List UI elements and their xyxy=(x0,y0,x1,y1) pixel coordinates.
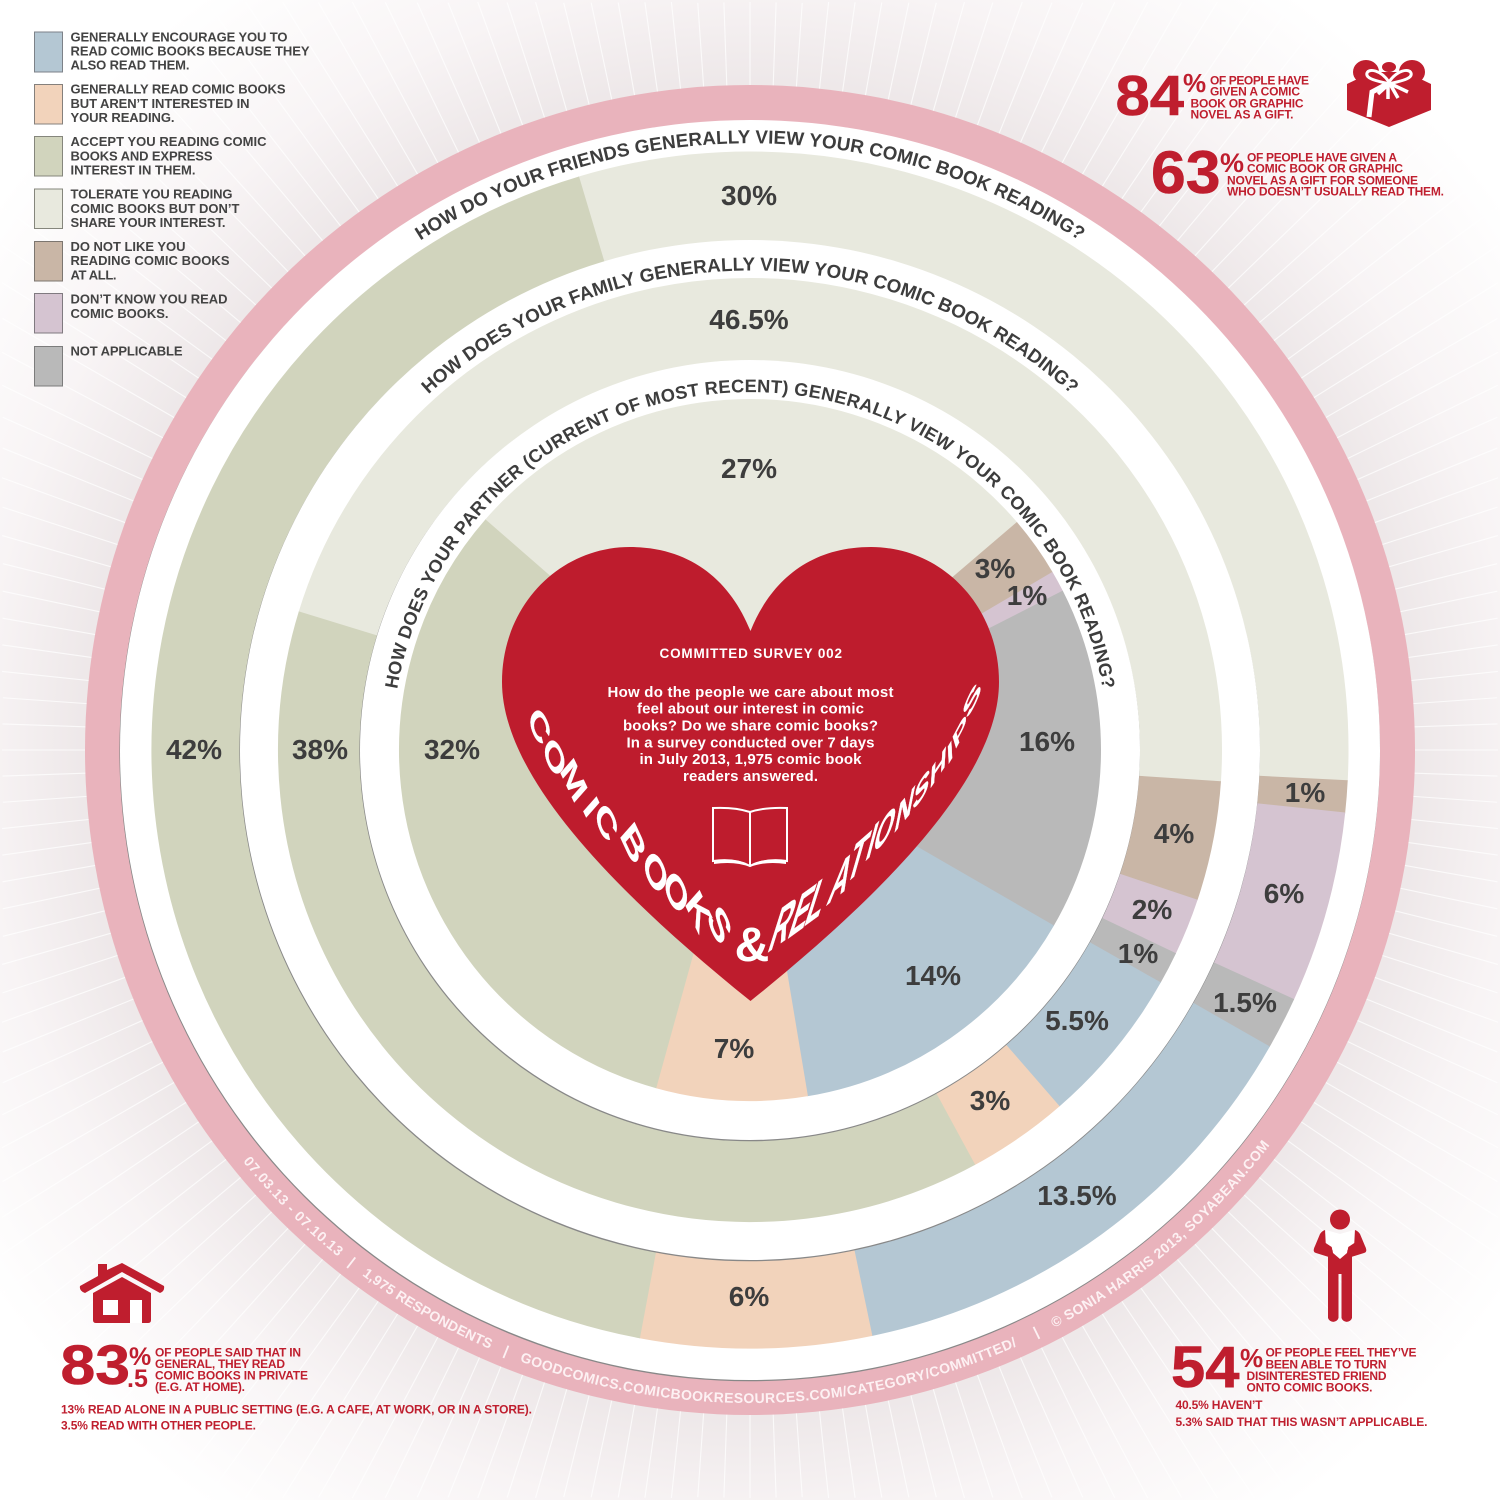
title: comic books: M xyxy=(555,751,592,810)
icon: person reading xyxy=(1314,1210,1366,1322)
stat: 84 percent gift xyxy=(1116,64,1309,128)
legend item: tolerate: TOLERATE YOU READING xyxy=(70,186,232,202)
stat: 54 percent converted friend: OF PEOPLE FEEL THEY’VE xyxy=(1266,1346,1416,1360)
percentage labels: 2% xyxy=(1132,894,1172,925)
pie chart: partner xyxy=(502,502,998,998)
ring chart: family xyxy=(143,143,1357,1357)
stat: 54 percent converted friend: % xyxy=(1240,1343,1263,1373)
stat: 54 percent converted friend: 5.3% SAID THAT THIS WASN’T APPLICABLE. xyxy=(1176,1415,1428,1429)
percentage labels: 1% xyxy=(1007,580,1047,611)
legend item: do not know xyxy=(34,292,228,333)
stat: 83.5 percent private: % xyxy=(129,1343,151,1371)
title: relationships: H xyxy=(918,730,959,805)
stat: 63 percent gift xyxy=(1151,139,1444,206)
icon: house xyxy=(80,1263,164,1323)
stat: 63 percent gift: % xyxy=(1220,148,1244,178)
legend item: tolerate xyxy=(34,186,240,230)
footer text on pink ring xyxy=(244,1140,1270,1404)
stat: 84 percent gift: BOOK OR GRAPHIC xyxy=(1190,96,1304,110)
footer text on pink ring: | xyxy=(346,1257,356,1268)
stat: 84 percent gift: % xyxy=(1183,68,1206,98)
legend item: read but not interested: GENERALLY READ COMIC BOOKS xyxy=(70,82,286,96)
title: comic books: B xyxy=(615,814,653,872)
legend item: tolerate: SHARE YOUR INTEREST. xyxy=(70,215,226,230)
title: relationships: A xyxy=(820,835,863,921)
title: ampersand: & xyxy=(735,919,769,972)
question: friends: HOW DO YOUR FRIENDS GENERALLY VIEW YOUR COMIC BOOK READING? xyxy=(414,130,1084,240)
legend item: accept xyxy=(34,134,267,178)
heart intro text: books? Do we share comic books? xyxy=(623,718,878,734)
stat: 83.5 percent private: 83 xyxy=(60,1333,130,1396)
footer text on pink ring: 07.03.13 - 07.10.13 xyxy=(244,1157,343,1256)
percentage labels: 27% xyxy=(721,453,777,484)
legend item: encourage: READ COMIC BOOKS BECAUSE THEY xyxy=(70,44,310,58)
percentage labels xyxy=(166,180,1325,1312)
percentage labels: 3% xyxy=(975,553,1015,584)
title: relationships: P xyxy=(941,699,979,766)
stat: 63 percent gift: COMIC BOOK OR GRAPHIC xyxy=(1247,162,1403,176)
legend item: accept: BOOKS AND EXPRESS xyxy=(70,148,213,164)
percentage labels: 6% xyxy=(729,1281,769,1312)
stat: 84 percent gift: NOVEL AS A GIFT. xyxy=(1190,108,1294,122)
title: relationships: I xyxy=(857,805,888,877)
legend item: encourage: ALSO READ THEM. xyxy=(70,58,190,72)
heart xyxy=(502,547,999,1016)
percentage labels: 14% xyxy=(905,960,961,991)
footer text on pink ring: | xyxy=(502,1346,510,1358)
title: relationships: N xyxy=(884,769,926,849)
title: relationships: E xyxy=(782,870,822,954)
stat: 63 percent gift: NOVEL AS A GIFT FOR SOMEONE xyxy=(1227,174,1418,188)
title: comic books: S xyxy=(701,897,738,953)
heart intro text: COMMITTED SURVEY 002 xyxy=(660,646,842,661)
title: comic books: K xyxy=(680,882,718,941)
percentage labels: 1% xyxy=(1118,938,1158,969)
outer pink ring xyxy=(85,85,1415,1415)
stat: 83.5 percent private: OF PEOPLE SAID THAT IN xyxy=(155,1346,301,1360)
stat: 63 percent gift: OF PEOPLE HAVE GIVEN A xyxy=(1247,150,1397,164)
legend item: do not like: AT ALL. xyxy=(70,268,116,282)
heart intro text xyxy=(608,646,894,785)
legend item: do not know: COMIC BOOKS. xyxy=(70,306,168,321)
title: comic books: O xyxy=(537,729,573,785)
footer text on pink ring: © SONIA HARRIS 2013, SOYABEAN.COM xyxy=(1052,1140,1270,1326)
title: relationships: O xyxy=(863,788,907,871)
stat: 83.5 percent private: COMIC BOOKS IN PRIVATE xyxy=(155,1368,308,1382)
legend item: tolerate: COMIC BOOKS BUT DON’T xyxy=(70,201,240,216)
heart intro text: How do the people we care about most xyxy=(608,684,894,701)
percentage labels: 1.5% xyxy=(1213,987,1277,1018)
percentage labels: 16% xyxy=(1019,726,1075,757)
title: relationships: R xyxy=(762,883,804,968)
icon: open book xyxy=(713,808,787,867)
question: family: HOW DOES YOUR FAMILY GENERALLY VIEW YOUR COMIC BOOK READING? xyxy=(420,258,1078,394)
stat: 83.5 percent private xyxy=(60,1333,532,1432)
stat: 83.5 percent private: .5 xyxy=(127,1365,148,1393)
stat: 54 percent converted friend: 54 xyxy=(1171,1335,1240,1400)
percentage labels: 46.5% xyxy=(709,304,789,335)
footer text on pink ring: | xyxy=(1032,1326,1040,1340)
percentage labels: 38% xyxy=(292,734,348,765)
stat: 84 percent gift: 84 xyxy=(1116,64,1184,128)
stat: 54 percent converted friend: BEEN ABLE TO TURN xyxy=(1266,1358,1386,1372)
stat: 84 percent gift: OF PEOPLE HAVE xyxy=(1210,74,1309,88)
legend item: not applicable xyxy=(34,344,183,386)
legend item: accept: ACCEPT YOU READING COMIC xyxy=(70,134,267,149)
legend item: do not know: DON’T KNOW YOU READ xyxy=(70,292,228,306)
legend item: do not like: DO NOT LIKE YOU xyxy=(70,239,186,254)
title: comic books: O xyxy=(636,842,675,903)
legend xyxy=(34,30,310,386)
title: relationships: I xyxy=(934,723,966,781)
stat: 83.5 percent private: (E.G. AT HOME). xyxy=(155,1380,245,1394)
title: comic books: C xyxy=(588,795,624,850)
percentage labels: 1% xyxy=(1285,777,1325,808)
stat: 54 percent converted friend: ONTO COMIC BOOKS. xyxy=(1246,1380,1372,1394)
percentage labels: 7% xyxy=(714,1033,754,1064)
footer text on pink ring: GOODCOMICS.COMICBOOKRESOURCES.COM/CATEGORY/COMMITTED/ xyxy=(521,1336,1016,1404)
stat: 63 percent gift: WHO DOESN’T USUALLY READ THEM. xyxy=(1227,184,1444,198)
title: relationships: T xyxy=(837,815,879,900)
heart intro text: in July 2013, 1,975 comic book xyxy=(640,751,862,768)
legend item: encourage xyxy=(34,30,310,72)
legend item: read but not interested: YOUR READING. xyxy=(70,110,174,125)
legend item: encourage: GENERALLY ENCOURAGE YOU TO xyxy=(70,30,288,44)
percentage labels: 5.5% xyxy=(1045,1005,1109,1036)
stat: 83.5 percent private: 13% READ ALONE IN A PUBLIC SETTING (E.G. A CAFE, AT WORK, OR IN A STORE). xyxy=(61,1402,532,1416)
legend item: accept: INTEREST IN THEM. xyxy=(70,162,196,178)
legend item: read but not interested xyxy=(34,82,286,125)
title: relationships: S xyxy=(901,752,942,828)
legend item: do not like: READING COMIC BOOKS xyxy=(70,253,230,268)
stat: 84 percent gift: GIVEN A COMIC xyxy=(1210,84,1300,98)
stat: 63 percent gift: 63 xyxy=(1151,139,1220,206)
heart intro text: readers answered. xyxy=(683,768,818,785)
title: comic books: C xyxy=(522,700,557,753)
stat: 54 percent converted friend xyxy=(1171,1335,1428,1429)
stat: 83.5 percent private: GENERAL, THEY READ xyxy=(155,1357,285,1371)
title: relationships: S xyxy=(951,665,993,736)
question: partner: HOW DOES YOUR PARTNER (CURRENT OF MOST RECENT) GENERALLY VIEW YOUR COMIC BOOK READING? xyxy=(385,380,1114,688)
stat: 83.5 percent private: 3.5% READ WITH OTHER PEOPLE. xyxy=(61,1418,256,1432)
title: comic books: O xyxy=(657,862,696,923)
percentage labels: 4% xyxy=(1154,818,1194,849)
percentage labels: 13.5% xyxy=(1037,1180,1117,1211)
title: comic books: I xyxy=(578,790,604,825)
legend item: not applicable: NOT APPLICABLE xyxy=(70,344,183,358)
percentage labels: 6% xyxy=(1264,878,1304,909)
percentage labels: 30% xyxy=(721,180,777,211)
footer text on pink ring: 1,975 RESPONDENTS xyxy=(362,1269,492,1348)
stat: 54 percent converted friend: 40.5% HAVEN’T xyxy=(1176,1398,1263,1412)
percentage labels: 42% xyxy=(166,734,222,765)
percentage labels: 3% xyxy=(970,1085,1010,1116)
percentage labels: 32% xyxy=(424,734,480,765)
legend item: read but not interested: BUT AREN’T INTERESTED IN xyxy=(70,96,250,111)
title: relationships: L xyxy=(798,859,837,942)
legend item: do not like xyxy=(34,239,230,282)
stat: 54 percent converted friend: DISINTERESTED FRIEND xyxy=(1246,1369,1387,1383)
heart intro text: feel about our interest in comic xyxy=(637,701,864,718)
heart intro text: In a survey conducted over 7 days xyxy=(626,734,874,751)
icon: gift xyxy=(1347,60,1431,127)
